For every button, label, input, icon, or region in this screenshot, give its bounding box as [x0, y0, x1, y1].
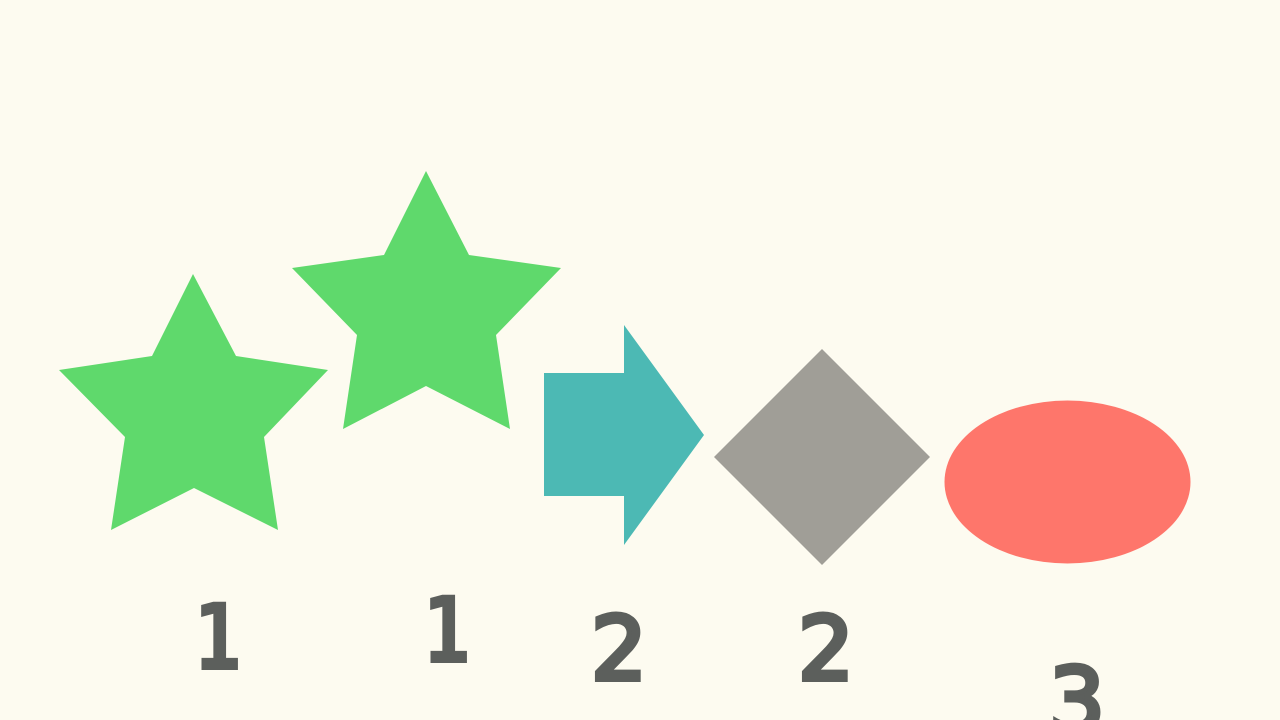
label: arrow count: 2 [591, 598, 647, 700]
icon: green star 1 [59, 274, 328, 530]
label: star 2 count: 1 [422, 576, 472, 686]
icon: grey diamond [714, 349, 930, 565]
icon: green star 2 [292, 171, 561, 429]
label: star 1 count: 1 [193, 583, 243, 693]
label: diamond count: 2 [798, 598, 854, 700]
icon: red ellipse [944, 400, 1190, 564]
icon: teal arrow [544, 325, 704, 545]
